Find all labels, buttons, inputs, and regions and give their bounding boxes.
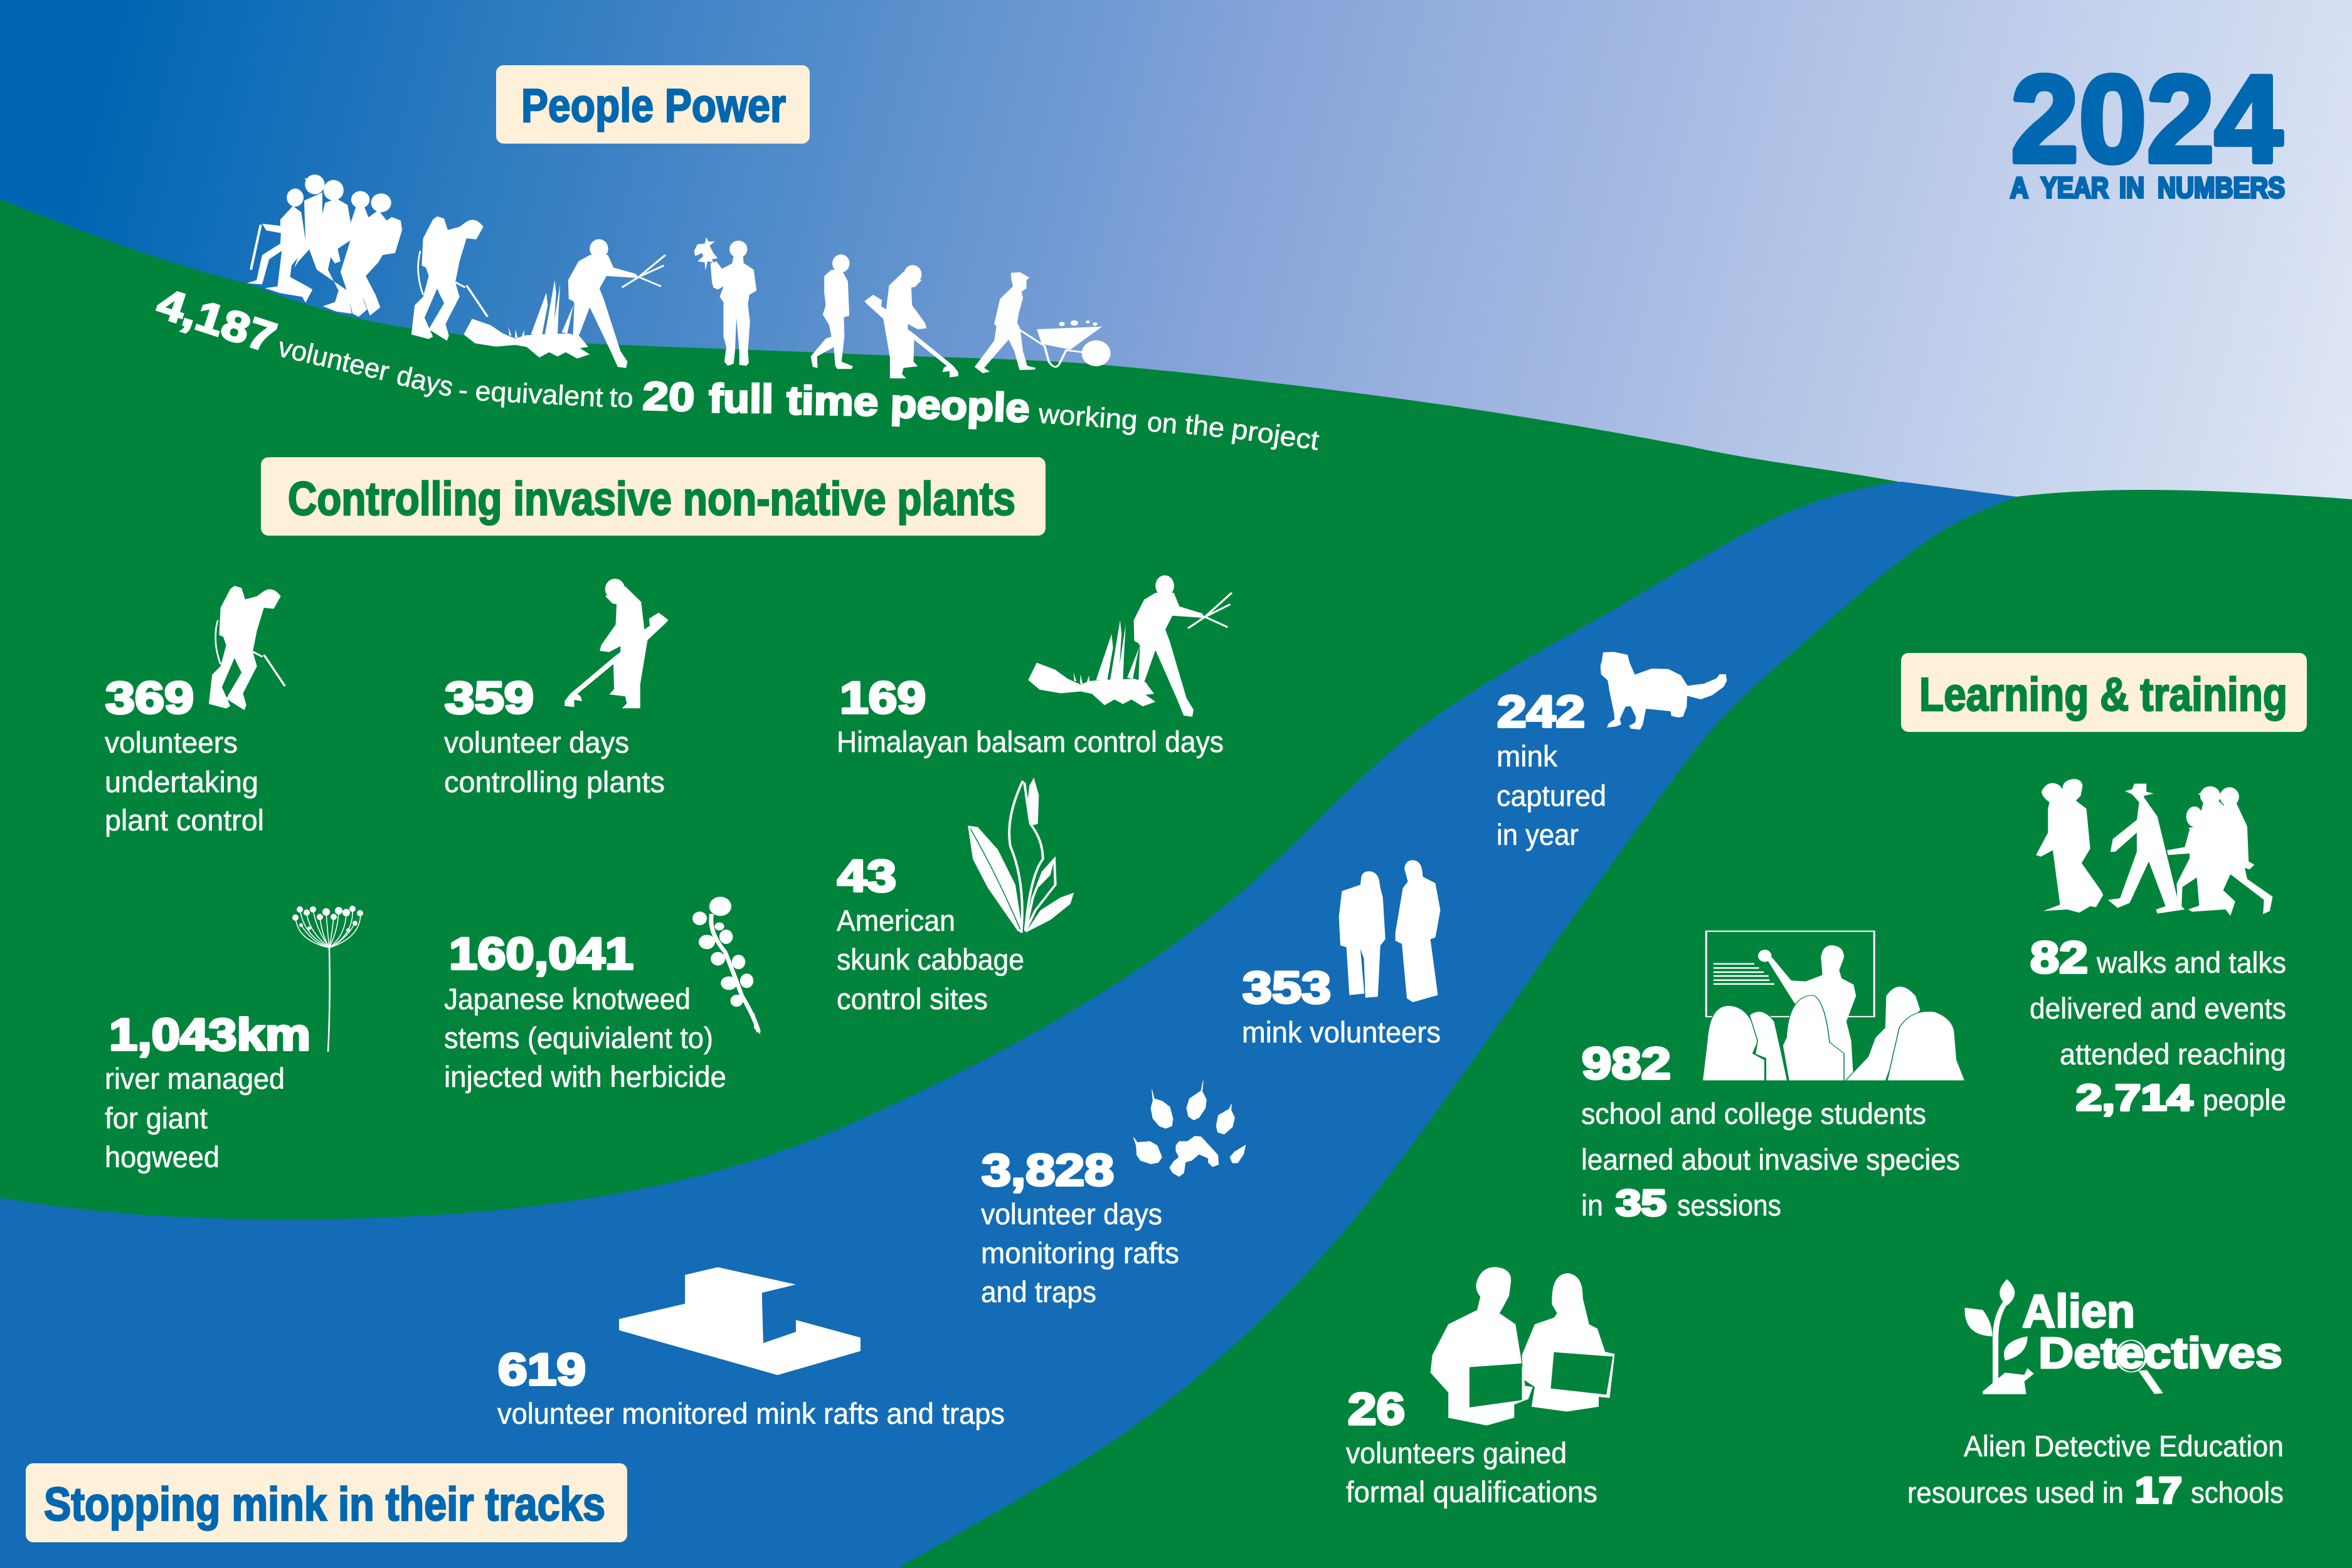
stat: 369 volunteers bbox=[105, 586, 285, 837]
curved caption: 4,187 volunteer days: 20 bbox=[642, 373, 695, 420]
stat: 43 skunk cabbage sites: 43 bbox=[837, 852, 896, 901]
stat: 353 mink volunteers bbox=[1242, 860, 1441, 1049]
stat: 160,041 knotweed stems: Japanese knotweed bbox=[444, 982, 691, 1015]
curved caption: 4,187 volunteer days: working bbox=[1037, 398, 1138, 436]
title: 2024 a year in numbers: IN bbox=[2119, 171, 2144, 204]
stat: 369 volunteers: plant control bbox=[105, 803, 264, 837]
title: 2024 a year in numbers: 2024 bbox=[2011, 50, 2282, 188]
logo: Alien Detectives: Alien bbox=[2022, 1285, 2135, 1337]
icon: group of walkers bbox=[2036, 779, 2272, 916]
icon: skunk cabbage plant bbox=[968, 778, 1074, 933]
stat: 619 mink rafts and traps: 619 bbox=[498, 1345, 586, 1395]
curved caption: 4,187 volunteer days: full bbox=[709, 376, 774, 421]
curved caption: 4,187 volunteer days: days bbox=[394, 360, 456, 403]
stat: 82 walks and talks: 82 bbox=[2030, 933, 2088, 983]
stat: 353 mink volunteers: 353 bbox=[1242, 963, 1331, 1013]
stat: 1,043km river managed: for giant bbox=[105, 1101, 208, 1135]
stat: 160,041 knotweed stems: injected with herbicide bbox=[444, 1060, 726, 1093]
stat: 242 mink captured: 242 bbox=[1497, 687, 1585, 737]
logo: Alien Detectives: Detectives bbox=[2038, 1328, 2282, 1377]
illustration: volunteers at work on the hillside bbox=[246, 174, 1111, 378]
curved caption: 4,187 volunteer days: 4,187 bbox=[151, 279, 282, 362]
stat: 169 balsam control days bbox=[837, 575, 1232, 758]
stat: 982 students: 35 bbox=[1616, 1183, 1666, 1224]
stat: 242 mink captured: in year bbox=[1496, 818, 1579, 851]
stat: 982 students: sessions bbox=[1677, 1189, 1781, 1222]
stat: 82 walks and talks: delivered and events bbox=[2030, 992, 2286, 1025]
stat: 43 skunk cabbage sites: American bbox=[837, 904, 955, 937]
stat: 359 volunteer days bbox=[444, 579, 668, 798]
icon: giant hogweed flower bbox=[292, 906, 363, 1052]
stat: 1,043km river managed: river managed bbox=[105, 1062, 285, 1095]
stat: 619 mink rafts and traps: volunteer monitored mink rafts and traps bbox=[497, 1397, 1005, 1430]
icon: mink raft bbox=[619, 1267, 861, 1375]
stat: Alien Detective Education in 17 schools: Alien Detective Education bbox=[1964, 1429, 2284, 1463]
heading: Controlling invasive non-native plants bbox=[261, 457, 1046, 536]
icon: person pulling balsam bbox=[464, 239, 665, 368]
icon: person with strimmer bbox=[564, 579, 668, 708]
stat: 982 students: school and college students bbox=[1581, 1097, 1926, 1130]
curved caption: 4,187 volunteer days: volunteer bbox=[275, 332, 392, 387]
icon: person strimming bbox=[864, 265, 958, 378]
heading: Learning & training bbox=[1901, 653, 2307, 732]
icon: person with backpack sprayer bbox=[209, 586, 285, 710]
heading: Learning & training: Learning & training bbox=[1919, 668, 2287, 721]
stat: 169 balsam control days: Himalayan balsam control days bbox=[837, 725, 1224, 758]
stat: 26 volunteers gained qualifications bbox=[1346, 1267, 1614, 1508]
stat: 353 mink volunteers: mink volunteers bbox=[1242, 1015, 1441, 1049]
stat: 3,828 volunteer days monitoring: 3,828 bbox=[982, 1146, 1114, 1195]
heading: Stopping mink in their tracks: Stopping mink in their tracks bbox=[44, 1478, 605, 1530]
title: 2024 a year in numbers: A bbox=[2010, 171, 2028, 204]
heading: Stopping mink in their tracks bbox=[26, 1463, 627, 1542]
icon: group of hikers bbox=[246, 174, 402, 317]
stat: 169 balsam control days: 169 bbox=[840, 674, 926, 723]
stat: 43 skunk cabbage sites bbox=[837, 778, 1074, 1015]
stat: 26 volunteers gained qualifications: 26 bbox=[1348, 1385, 1405, 1434]
icon: teacher at board with students bbox=[1702, 931, 1965, 1081]
stat: 160,041 knotweed stems: 160,041 bbox=[449, 930, 633, 979]
stat: 359 volunteer days: volunteer days bbox=[444, 726, 629, 759]
icon: mink bbox=[1601, 652, 1727, 729]
icon: person pulling Himalayan balsam bbox=[1028, 575, 1232, 717]
stat: 982 students: 982 bbox=[1582, 1039, 1671, 1089]
stat: 26 volunteers gained qualifications: formal qualifications bbox=[1346, 1475, 1597, 1508]
stat: 982 students: learned about invasive species bbox=[1581, 1143, 1960, 1176]
curved caption: 4,187 volunteer days: the bbox=[1184, 409, 1226, 444]
heading: People Power: People Power bbox=[521, 79, 786, 132]
stat: 82 walks and talks: people bbox=[2203, 1083, 2286, 1116]
stat: 43 skunk cabbage sites: skunk cabbage bbox=[837, 943, 1024, 976]
icon: person spraying bbox=[411, 216, 487, 341]
heading: Controlling invasive non-native plants: Controlling invasive non-native plants bbox=[288, 472, 1015, 525]
stat: 160,041 knotweed stems: stems (equivialent to) bbox=[444, 1021, 713, 1054]
stat: 3,828 volunteer days monitoring bbox=[981, 1081, 1246, 1308]
curved caption: 4,187 volunteer days: equivalent bbox=[474, 376, 604, 413]
stat: 1,043km river managed: hogweed bbox=[105, 1140, 220, 1173]
curved caption: 4,187 volunteer days: people bbox=[890, 381, 1030, 431]
title: 2024 a year in numbers: NUMBERS bbox=[2158, 171, 2285, 204]
icon: two volunteers standing bbox=[1339, 860, 1440, 1002]
curved caption: 4,187 volunteer days bbox=[151, 279, 1321, 456]
stat: 26 volunteers gained qualifications: volunteers gained bbox=[1346, 1436, 1567, 1470]
icon: Japanese knotweed sprig bbox=[692, 897, 761, 1035]
stat: 1,043km river managed bbox=[105, 906, 363, 1173]
logo: Alien Detectives bbox=[1965, 1279, 2282, 1394]
stat: 160,041 knotweed stems bbox=[444, 897, 761, 1093]
stat: 359 volunteer days: 359 bbox=[445, 674, 534, 723]
stat: 369 volunteers: undertaking bbox=[105, 765, 258, 798]
stat: 43 skunk cabbage sites: control sites bbox=[837, 982, 988, 1015]
icon: two people holding tablets bbox=[1431, 1267, 1614, 1426]
stat: 242 mink captured bbox=[1496, 652, 1727, 851]
stat: 982 students: in bbox=[1581, 1189, 1603, 1222]
stat: 82 walks and talks: 2,714 bbox=[2076, 1078, 2193, 1118]
stat: 359 volunteer days: controlling plants bbox=[444, 765, 665, 798]
stat: Alien Detective Education in 17 schools: resources used in bbox=[1907, 1476, 2124, 1509]
stat: Alien Detective Education in 17 schools bbox=[1907, 1429, 2284, 1511]
stat: 82 walks and talks: attended reaching bbox=[2060, 1037, 2286, 1071]
icon: walkers and wheelbarrow bbox=[694, 237, 1111, 373]
icon: mink paw print bbox=[1133, 1081, 1246, 1177]
stat: 242 mink captured: captured bbox=[1496, 779, 1606, 812]
blue river bbox=[0, 482, 2016, 1568]
stat: 82 walks and talks: walks and talks bbox=[2096, 946, 2286, 979]
stat: 3,828 volunteer days monitoring: volunteer days bbox=[981, 1197, 1162, 1231]
stat: 3,828 volunteer days monitoring: monitoring rafts bbox=[981, 1236, 1179, 1269]
stat: 1,043km river managed: 1,043km bbox=[109, 1010, 310, 1060]
stat: 369 volunteers: volunteers bbox=[105, 726, 238, 759]
stat: 982 students bbox=[1581, 931, 1965, 1224]
heading: People Power bbox=[496, 65, 810, 144]
stat: Alien Detective Education in 17 schools: schools bbox=[2191, 1476, 2284, 1509]
stat: 82 walks and talks bbox=[2030, 779, 2286, 1118]
curved caption: 4,187 volunteer days: to bbox=[608, 382, 634, 414]
icon: seedling, mink and magnifier bbox=[1965, 1279, 2159, 1394]
curved caption: 4,187 volunteer days: time bbox=[787, 378, 879, 425]
curved caption: 4,187 volunteer days: - bbox=[457, 374, 469, 406]
curved caption: 4,187 volunteer days: on bbox=[1146, 406, 1179, 440]
stat: 242 mink captured: mink bbox=[1496, 739, 1557, 773]
title: 2024 a year in numbers: YEAR bbox=[2041, 171, 2109, 204]
stat: Alien Detective Education in 17 schools: 17 bbox=[2135, 1470, 2182, 1511]
curved caption: 4,187 volunteer days: project bbox=[1230, 413, 1321, 456]
stat: 369 volunteers: 369 bbox=[105, 674, 194, 723]
stat: 619 mink rafts and traps bbox=[497, 1267, 1005, 1430]
stat: 3,828 volunteer days monitoring: and traps bbox=[981, 1275, 1096, 1308]
